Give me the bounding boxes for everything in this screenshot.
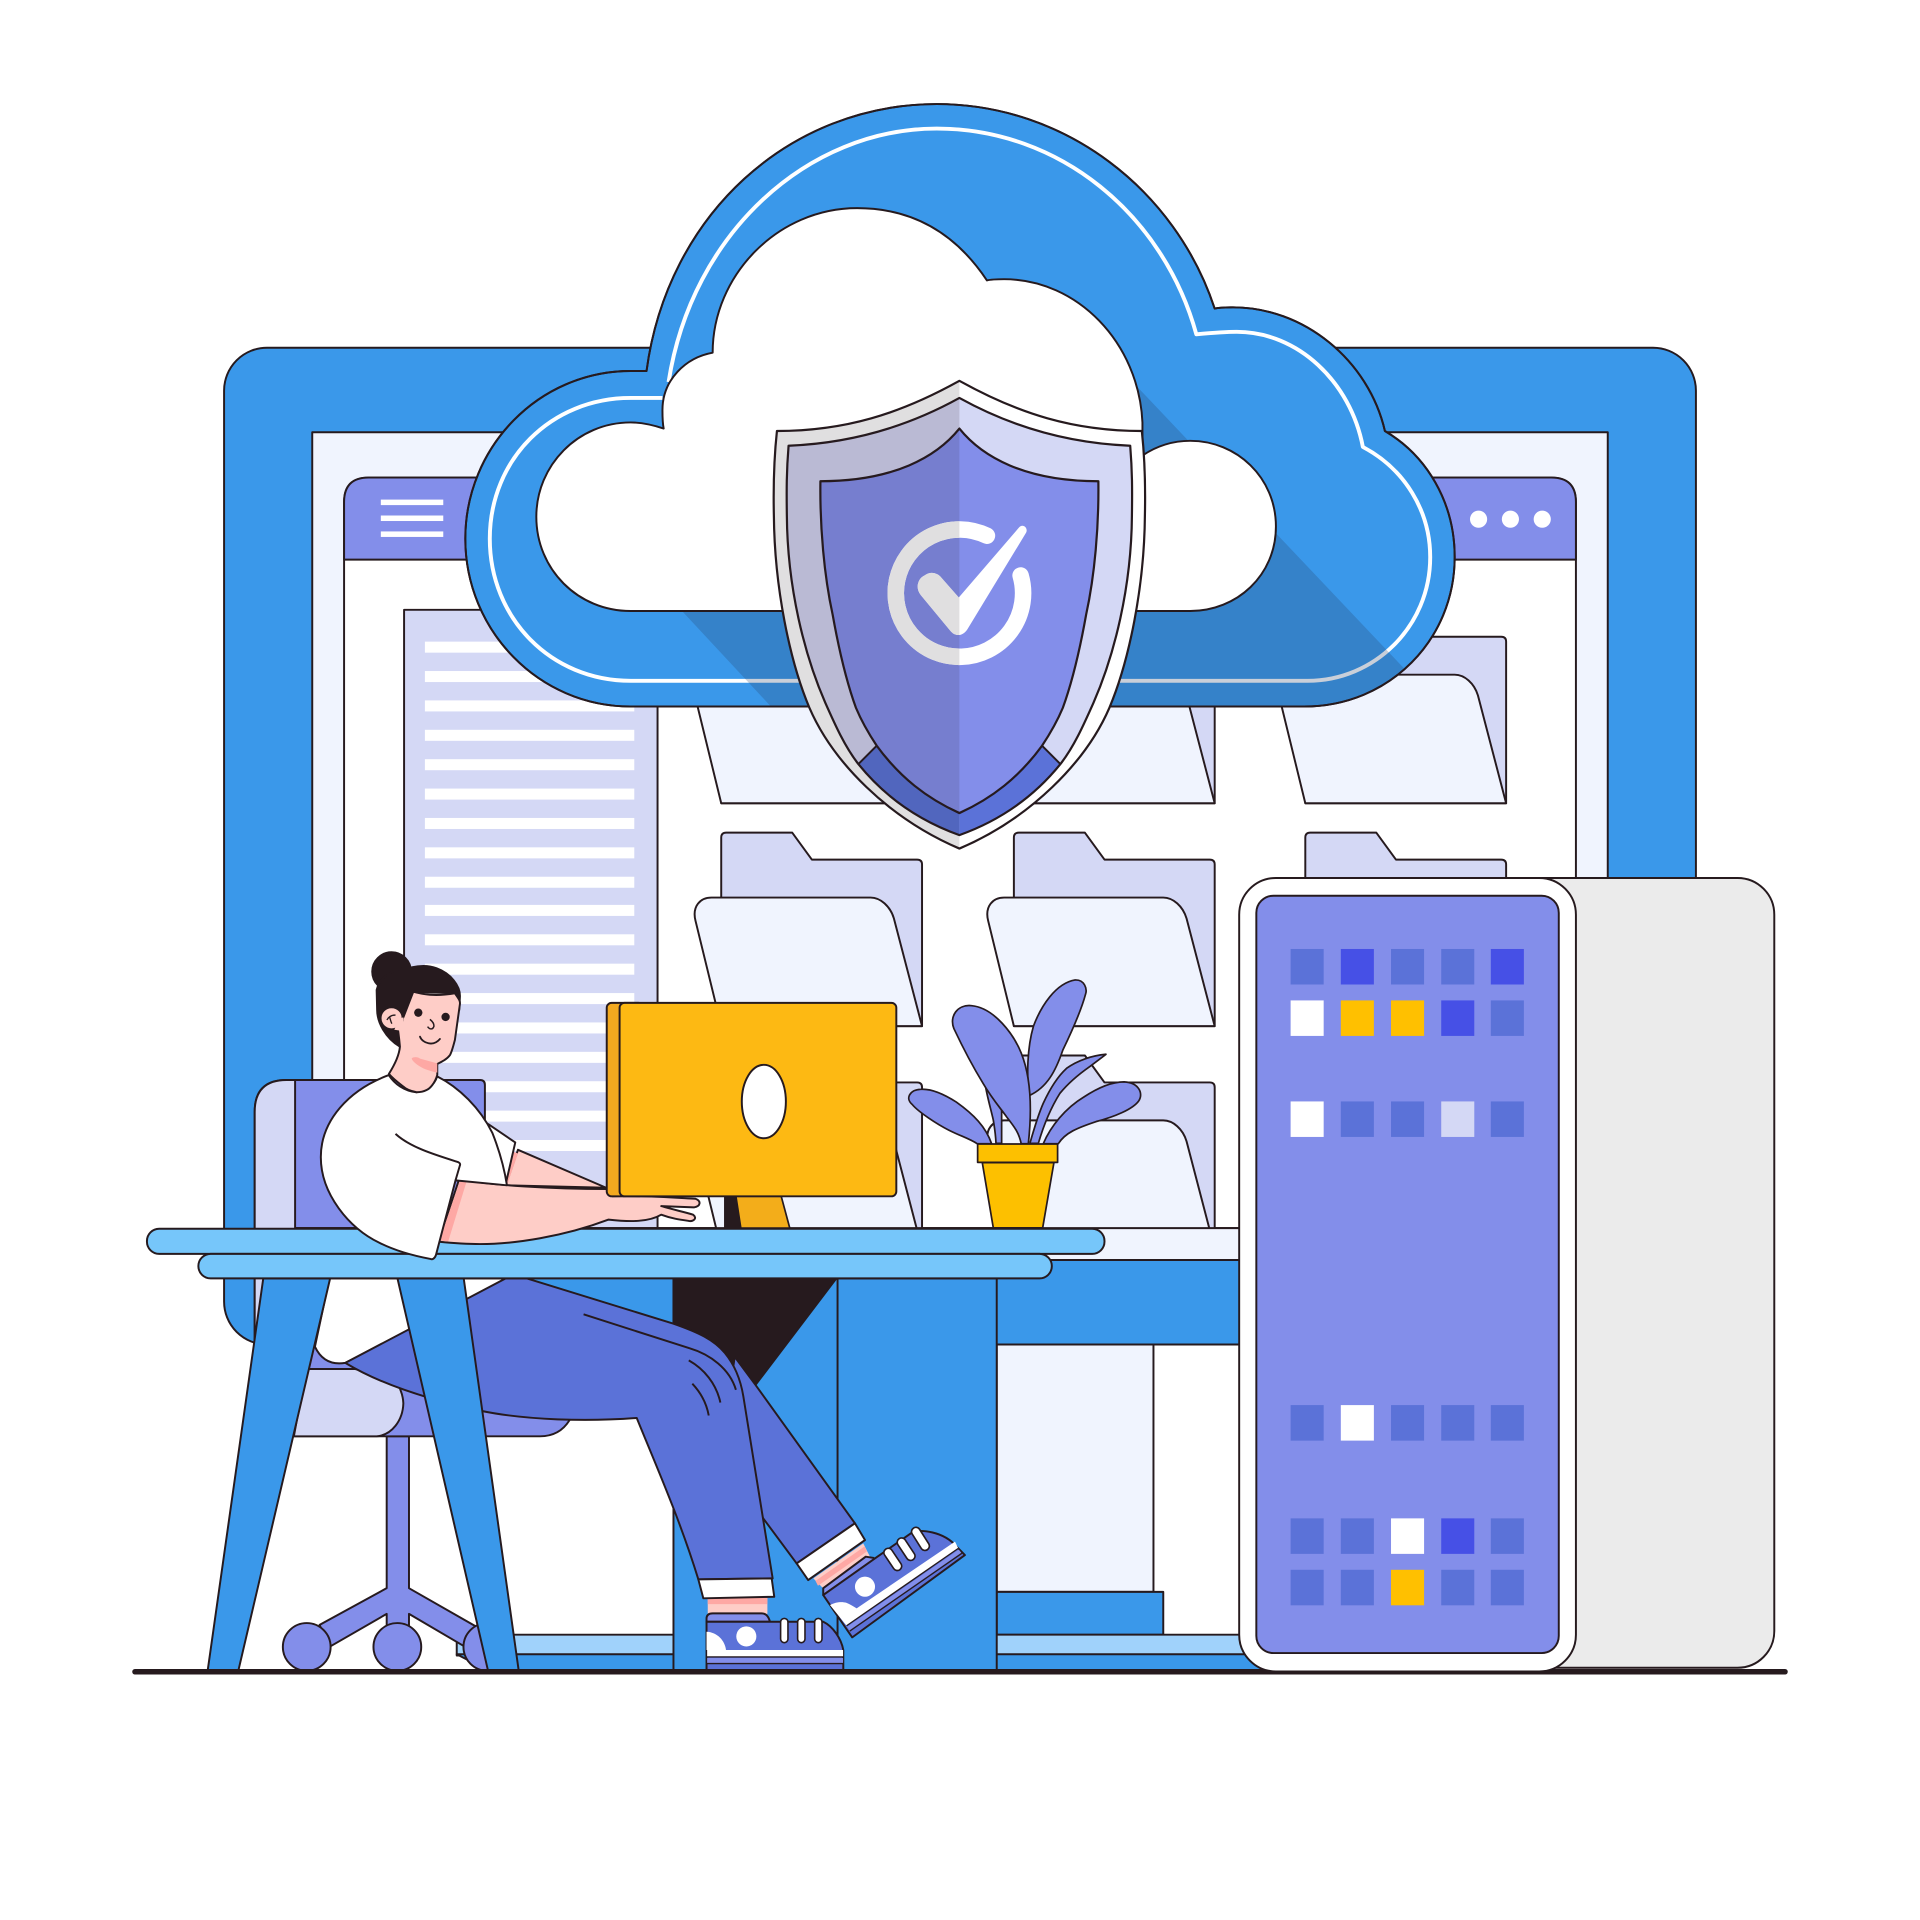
person upper body	[321, 952, 700, 1259]
server tower	[1239, 878, 1774, 1671]
illustration: cloud data security workspace	[132, 103, 1788, 1674]
security shield	[774, 381, 1145, 857]
desktop monitor frame	[224, 348, 1696, 1344]
server status lights	[1291, 949, 1524, 1605]
potted plant	[909, 980, 1141, 1228]
desk cabinet	[673, 1278, 997, 1671]
window menu icon	[381, 500, 443, 537]
monitor stand and base	[457, 1344, 1273, 1671]
laptop	[607, 1003, 896, 1196]
shield check icon	[896, 526, 1027, 657]
person lower body	[315, 1278, 870, 1614]
folders grid	[312, 610, 1608, 1260]
front sneaker	[707, 1613, 844, 1670]
cloud with shadow	[465, 104, 1455, 735]
rear sneaker	[823, 1531, 965, 1637]
laptop stand	[725, 1196, 790, 1228]
document panel with text lines	[404, 610, 658, 1228]
head	[372, 952, 460, 1092]
window dots	[1470, 511, 1551, 528]
office chair	[255, 1080, 569, 1671]
ground line	[132, 1669, 1788, 1674]
desk with legs and top	[147, 1229, 1104, 1671]
